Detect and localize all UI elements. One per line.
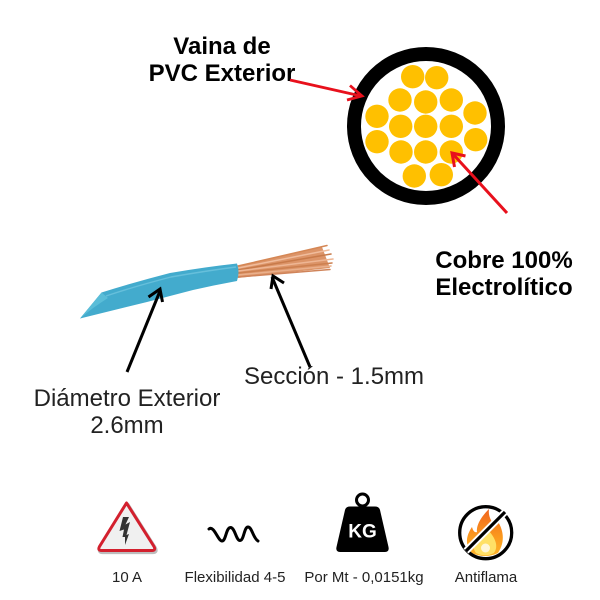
wire photo illustration (80, 246, 333, 318)
cable cross-section diagram (354, 54, 498, 198)
blue sheath (80, 264, 238, 318)
heading: outer sheath label: Vaina de (173, 33, 271, 60)
label: exterior diameter: Diámetro Exterior (34, 385, 220, 412)
label: flame retardant: Antiflama (455, 569, 518, 586)
heading: copper label: Cobre 100% (435, 247, 573, 274)
icon: flexibility wave (209, 527, 258, 541)
label: flexibility: Flexibilidad 4-5 (185, 569, 285, 586)
label: amperage: 10 A (112, 569, 142, 586)
label: weight per meter: Por Mt - 0,0151kg (304, 569, 424, 586)
label: exterior diameter (34, 385, 220, 439)
arrow: copper (452, 153, 507, 213)
heading: outer sheath label (149, 33, 295, 87)
icon: flame-retardant (460, 507, 512, 559)
heading: copper label: Electrolítico (435, 274, 573, 301)
icon: kg weight: KG (348, 522, 377, 542)
icon: electrical hazard (99, 503, 156, 552)
heading: outer sheath label: PVC Exterior (149, 60, 295, 87)
copper strands (238, 246, 333, 278)
arrow: diameter (127, 289, 162, 372)
label: section: Sección - 1.5mm (244, 363, 424, 390)
heading: copper label (435, 247, 573, 301)
icon: kg weight (336, 494, 389, 552)
arrow: section (271, 276, 310, 367)
arrow: sheath (290, 80, 362, 100)
label: exterior diameter: 2.6mm (90, 412, 164, 439)
